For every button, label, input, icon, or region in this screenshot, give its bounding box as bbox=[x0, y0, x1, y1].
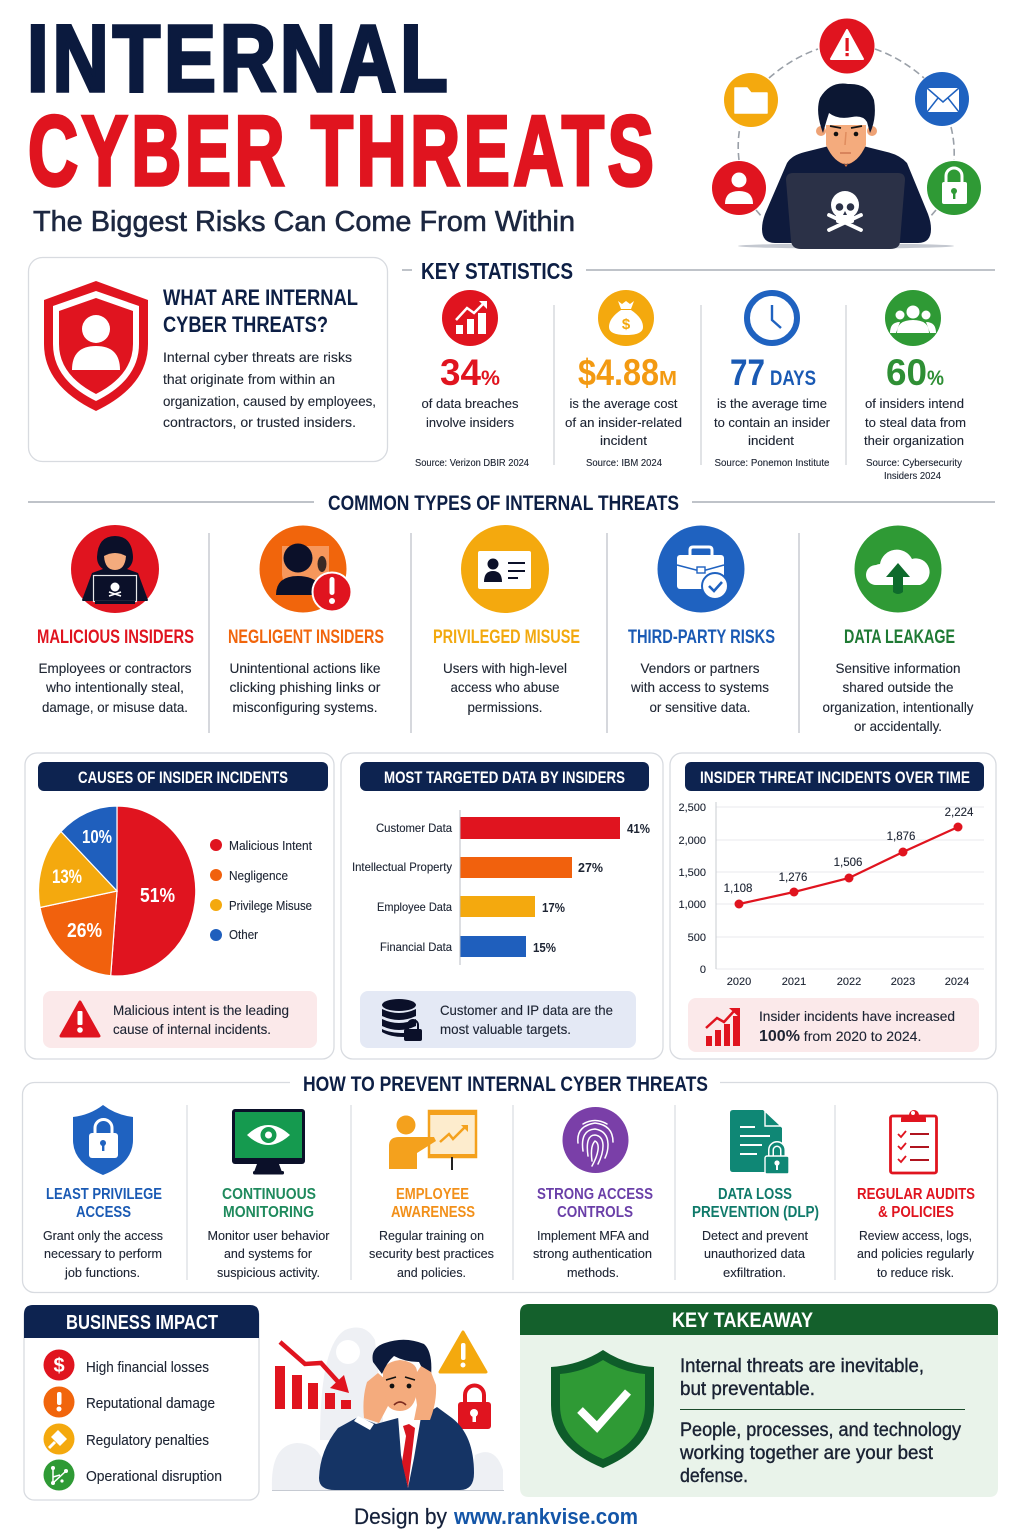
line chart: 1,506 bbox=[834, 857, 862, 869]
threat type: data leakage: or accidentally. bbox=[854, 718, 942, 734]
line chart: 2023 bbox=[891, 976, 915, 988]
threat type: third-party risks bbox=[628, 526, 775, 715]
item: reputational damage bbox=[44, 1386, 215, 1418]
line chart: 0 bbox=[700, 964, 706, 976]
heading: common types: COMMON TYPES OF INTERNAL THREATS bbox=[328, 492, 679, 515]
prevention: employee awareness: Regular training on bbox=[379, 1228, 484, 1243]
line chart: 1,108 bbox=[724, 883, 752, 895]
prevention: least privilege: LEAST PRIVILEGE bbox=[46, 1186, 162, 1203]
threat type: third-party risks: Vendors or partners bbox=[640, 660, 760, 676]
definition text: Internal cyber threats are risks bbox=[163, 349, 352, 365]
footer credit: www.rankvise.com bbox=[453, 1504, 638, 1529]
panel: causes of insider incidents bbox=[25, 753, 334, 1059]
threat type: data leakage: shared outside the bbox=[842, 679, 954, 695]
bar chart: 15% bbox=[533, 940, 556, 955]
icon: shield lock bbox=[73, 1105, 133, 1175]
stat: 60%: Insiders 2024 bbox=[884, 471, 941, 482]
pie chart bbox=[39, 806, 196, 976]
prevention: data loss prevention: unauthorized data bbox=[704, 1246, 806, 1261]
stat: $4.88M: $4.88 bbox=[578, 352, 659, 393]
stat: 34%: % bbox=[481, 367, 500, 390]
pie chart: 26% bbox=[67, 920, 102, 942]
line chart: 2020 bbox=[727, 976, 751, 988]
threat type: malicious insiders bbox=[37, 525, 194, 715]
threat type: negligent insiders: NEGLIGENT INSIDERS bbox=[228, 627, 384, 648]
threat type: malicious insiders: Employees or contractors bbox=[38, 660, 192, 676]
prevention: data loss prevention: exfiltration. bbox=[723, 1265, 786, 1280]
icon: clock bbox=[747, 293, 797, 343]
legend bbox=[210, 839, 312, 942]
stat: $4.88M: of an insider-related bbox=[565, 415, 682, 430]
takeaway text: but preventable. bbox=[680, 1378, 815, 1400]
callout: Malicious intent is the leading bbox=[113, 1002, 289, 1018]
prevention: regular audits: & POLICIES bbox=[878, 1204, 954, 1221]
takeaway text: People, processes, and technology bbox=[680, 1419, 961, 1441]
callout: Insider incidents have increased bbox=[759, 1008, 955, 1024]
heading bbox=[163, 285, 358, 337]
line chart: 500 bbox=[688, 932, 706, 944]
line chart bbox=[678, 802, 984, 988]
panel: most targeted data bbox=[341, 753, 663, 1059]
prevention: least privilege: ACCESS bbox=[76, 1204, 131, 1221]
stat: $4.88M: incident bbox=[600, 433, 647, 448]
threat type: third-party risks: with access to systems bbox=[630, 679, 769, 695]
prevention: least privilege: Grant only the access bbox=[43, 1228, 163, 1243]
takeaway text: Internal threats are inevitable, bbox=[680, 1355, 924, 1377]
stat: 34%: of data breaches bbox=[422, 396, 519, 411]
threat type: malicious insiders: damage, or misuse data. bbox=[42, 699, 188, 715]
threat type: malicious insiders: MALICIOUS INSIDERS bbox=[37, 627, 194, 648]
icon: padlock bbox=[927, 161, 981, 215]
definition text: organization, caused by employees, bbox=[163, 393, 376, 409]
item: operational disruption: Operational disruption bbox=[86, 1469, 222, 1485]
item: financial losses bbox=[44, 1350, 209, 1380]
line chart: 2,000 bbox=[678, 835, 706, 847]
title: CYBER THREATS bbox=[28, 97, 654, 207]
item: regulatory penalties: Regulatory penalties bbox=[86, 1433, 209, 1449]
header bbox=[38, 762, 328, 791]
header bbox=[685, 762, 984, 791]
stat: 77 days bbox=[714, 293, 831, 469]
stat: 77 days: Source: Ponemon Institute bbox=[714, 458, 830, 469]
prevention: employee awareness: AWARENESS bbox=[391, 1204, 475, 1221]
legend: Privilege Misuse bbox=[229, 899, 312, 913]
footer credit bbox=[354, 1504, 638, 1529]
threat type: privileged misuse: Users with high-level bbox=[443, 660, 567, 676]
icon: monitor with eye bbox=[232, 1109, 305, 1174]
stat: 77 days: incident bbox=[748, 433, 794, 448]
definition text: that originate from within an bbox=[163, 371, 335, 387]
icon: cloud upload bbox=[854, 526, 942, 612]
callout bbox=[688, 998, 979, 1052]
line chart: 2,500 bbox=[678, 802, 706, 814]
laptop with skull bbox=[786, 173, 905, 249]
icon: hooded hacker bbox=[71, 525, 159, 613]
panel: key takeaway bbox=[520, 1304, 998, 1497]
prevention: employee awareness: security best practices bbox=[369, 1246, 494, 1261]
subtitle: The Biggest Risks Can Come From Within bbox=[33, 206, 575, 238]
header: KEY TAKEAWAY bbox=[672, 1309, 813, 1332]
icon: person bbox=[712, 161, 766, 215]
line chart: 1,876 bbox=[887, 831, 915, 843]
callout: cause of internal incidents. bbox=[113, 1021, 271, 1037]
icon: rising bars bbox=[442, 290, 498, 346]
stat: 77 days: DAYS bbox=[770, 367, 816, 390]
stat: 60%: % bbox=[927, 367, 944, 390]
icon: shield with person bbox=[44, 281, 148, 411]
icon: fingerprint bbox=[562, 1107, 628, 1173]
bar chart: Intellectual Property bbox=[352, 860, 452, 874]
prevention: strong access controls: CONTROLS bbox=[557, 1204, 633, 1221]
icon: money bag bbox=[598, 290, 654, 346]
threat type: data leakage: Sensitive information bbox=[836, 660, 960, 676]
line chart: 1,276 bbox=[779, 872, 807, 884]
title: INTERNAL bbox=[27, 6, 448, 112]
definition text bbox=[163, 349, 376, 430]
illustration: stressed businessman bbox=[272, 1328, 504, 1490]
hero illustration: insider at laptop bbox=[712, 18, 981, 249]
stat: 60%: to steal data from bbox=[865, 415, 966, 430]
prevention: data loss prevention bbox=[692, 1110, 819, 1280]
item: regulatory penalties bbox=[44, 1424, 209, 1454]
pie chart: 51% bbox=[140, 885, 175, 907]
threat type: negligent insiders: clicking phishing links or bbox=[230, 679, 381, 695]
prevention: continuous monitoring: CONTINUOUS bbox=[222, 1186, 316, 1203]
stat: 77 days: 77 bbox=[730, 352, 765, 393]
icon: group of people bbox=[885, 290, 941, 346]
prevention: strong access controls: strong authentication bbox=[533, 1246, 652, 1261]
prevention: strong access controls: Implement MFA and bbox=[537, 1228, 649, 1243]
bar chart: 17% bbox=[542, 900, 565, 915]
stat: 34% bbox=[415, 290, 529, 469]
prevention: regular audits: and policies regularly bbox=[857, 1246, 974, 1261]
stat: 60%: Source: Cybersecurity bbox=[866, 458, 962, 469]
prevention: employee awareness bbox=[369, 1110, 494, 1280]
threat type: privileged misuse: permissions. bbox=[468, 699, 542, 715]
prevention: strong access controls bbox=[533, 1107, 653, 1280]
callout: 100% from 2020 to 2024. bbox=[759, 1028, 921, 1045]
stat: 34%: 34 bbox=[440, 352, 481, 393]
threat type: third-party risks: or sensitive data. bbox=[650, 699, 750, 715]
takeaway text: defense. bbox=[680, 1465, 748, 1487]
prevention: continuous monitoring: suspicious activity. bbox=[217, 1265, 320, 1280]
stat: 60% bbox=[864, 290, 966, 482]
stat: $4.88M: M bbox=[659, 368, 677, 390]
header bbox=[360, 762, 649, 791]
prevention: strong access controls: methods. bbox=[567, 1265, 619, 1280]
heading: key statistics: KEY STATISTICS bbox=[421, 258, 573, 284]
prevention: least privilege: job functions. bbox=[64, 1265, 140, 1280]
prevention: data loss prevention: PREVENTION (DLP) bbox=[692, 1204, 819, 1221]
title bbox=[27, 6, 654, 207]
takeaway text bbox=[679, 1355, 965, 1487]
item: reputational damage: Reputational damage bbox=[86, 1396, 215, 1412]
bar chart: 27% bbox=[578, 860, 603, 875]
prevention: continuous monitoring: and systems for bbox=[224, 1246, 313, 1261]
bar chart: Financial Data bbox=[380, 940, 452, 954]
icon: folder bbox=[724, 73, 778, 127]
threat type: data leakage bbox=[822, 526, 974, 734]
stat: 60%: 60 bbox=[886, 352, 927, 393]
icon: presenter with board bbox=[389, 1110, 477, 1170]
bar chart: 41% bbox=[627, 821, 650, 836]
stat: 77 days: is the average time bbox=[717, 396, 827, 411]
header: CAUSES OF INSIDER INCIDENTS bbox=[78, 768, 288, 787]
stat: 60%: of insiders intend bbox=[865, 396, 964, 411]
threat type: malicious insiders: who intentionally steal, bbox=[45, 679, 184, 695]
prevention: strong access controls: STRONG ACCESS bbox=[537, 1186, 653, 1203]
threat type: negligent insiders bbox=[228, 526, 384, 715]
item: financial losses: High financial losses bbox=[86, 1360, 209, 1376]
icon: mail bbox=[915, 72, 969, 126]
chart falling bbox=[275, 1342, 351, 1409]
prevention: regular audits: to reduce risk. bbox=[877, 1265, 954, 1280]
panel: how to prevent bbox=[22, 1073, 998, 1292]
threat type: privileged misuse bbox=[433, 525, 580, 715]
prevention: continuous monitoring: MONITORING bbox=[223, 1204, 314, 1221]
stat: 34%: Source: Verizon DBIR 2024 bbox=[415, 458, 529, 469]
header: MOST TARGETED DATA BY INSIDERS bbox=[384, 768, 625, 787]
line chart: 2021 bbox=[782, 976, 806, 988]
pie chart: 10% bbox=[82, 827, 112, 847]
prevention: employee awareness: and policies. bbox=[397, 1265, 466, 1280]
prevention: continuous monitoring bbox=[208, 1109, 330, 1280]
panel: incidents over time bbox=[670, 753, 996, 1059]
icon: warning triangle bbox=[440, 1332, 486, 1372]
prevention: regular audits bbox=[857, 1110, 975, 1280]
legend: Malicious Intent bbox=[229, 839, 312, 853]
bar chart: Employee Data bbox=[377, 900, 452, 914]
line chart: 1,500 bbox=[678, 867, 706, 879]
line chart: 1,000 bbox=[678, 899, 706, 911]
businessman bbox=[319, 1340, 474, 1490]
panel: what are internal cyber threats bbox=[28, 258, 388, 462]
panel: business impact bbox=[24, 1305, 259, 1500]
stat: $4.88M bbox=[565, 290, 682, 469]
pie chart: 13% bbox=[52, 867, 82, 888]
prevention: continuous monitoring: Monitor user behavior bbox=[208, 1228, 330, 1243]
callout bbox=[43, 991, 317, 1048]
prevention: least privilege: necessary to perform bbox=[44, 1246, 162, 1261]
icon: person with alert bbox=[260, 526, 352, 612]
icon: red lock bbox=[458, 1386, 491, 1429]
line chart: 2,224 bbox=[945, 807, 974, 819]
header bbox=[520, 1304, 998, 1335]
icon: id card bbox=[461, 525, 549, 613]
prevention: regular audits: Review access, logs, bbox=[859, 1228, 972, 1243]
callout: Customer and IP data are the bbox=[440, 1002, 613, 1018]
prevention: data loss prevention: DATA LOSS bbox=[718, 1186, 792, 1203]
prevention: employee awareness: EMPLOYEE bbox=[396, 1186, 469, 1203]
heading: WHAT ARE INTERNAL bbox=[163, 285, 358, 310]
bar chart bbox=[352, 810, 650, 965]
icon: shield check bbox=[551, 1350, 654, 1468]
threat type: data leakage: DATA LEAKAGE bbox=[844, 627, 955, 648]
threat type: data leakage: organization, intentionally bbox=[822, 699, 974, 715]
threat type: negligent insiders: Unintentional actions like bbox=[230, 660, 381, 676]
stat: $4.88M: Source: IBM 2024 bbox=[586, 458, 662, 469]
line chart: 2022 bbox=[837, 976, 861, 988]
header bbox=[24, 1305, 259, 1338]
heading: HOW TO PREVENT INTERNAL CYBER THREATS bbox=[303, 1073, 708, 1096]
stat: 77 days: to contain an insider bbox=[714, 415, 831, 430]
callout: most valuable targets. bbox=[440, 1021, 571, 1037]
icon: money bag: $ bbox=[622, 316, 631, 333]
threat type: privileged misuse: PRIVILEGED MISUSE bbox=[433, 627, 580, 648]
bar chart: Customer Data bbox=[376, 821, 452, 835]
takeaway text: working together are your best bbox=[679, 1442, 934, 1464]
header: BUSINESS IMPACT bbox=[66, 1312, 218, 1334]
threat type: privileged misuse: access who abuse bbox=[450, 679, 560, 695]
heading: CYBER THREATS? bbox=[163, 312, 328, 337]
icon: warning bbox=[820, 18, 874, 74]
stat: 60%: their organization bbox=[864, 433, 964, 448]
line chart: 2024 bbox=[945, 976, 969, 988]
footer credit: Design by bbox=[354, 1504, 447, 1529]
prevention: data loss prevention: Detect and prevent bbox=[702, 1228, 808, 1243]
legend: Negligence bbox=[229, 869, 288, 883]
threat type: third-party risks: THIRD-PARTY RISKS bbox=[628, 627, 775, 648]
icon: document with lock bbox=[730, 1110, 789, 1174]
icon: clipboard bbox=[890, 1110, 936, 1173]
item: financial losses: $ bbox=[53, 1355, 65, 1377]
threat type: negligent insiders: misconfiguring systems. bbox=[232, 699, 378, 715]
person bbox=[762, 84, 931, 243]
stat: $4.88M: is the average cost bbox=[570, 396, 678, 411]
definition text: contractors, or trusted insiders. bbox=[163, 414, 356, 430]
callout bbox=[360, 991, 636, 1048]
legend: Other bbox=[229, 928, 258, 942]
stat: 34%: involve insiders bbox=[426, 415, 514, 430]
prevention: regular audits: REGULAR AUDITS bbox=[857, 1186, 975, 1203]
icon: briefcase with check bbox=[658, 526, 744, 612]
item: operational disruption bbox=[44, 1460, 222, 1490]
prevention: least privilege bbox=[43, 1105, 163, 1280]
